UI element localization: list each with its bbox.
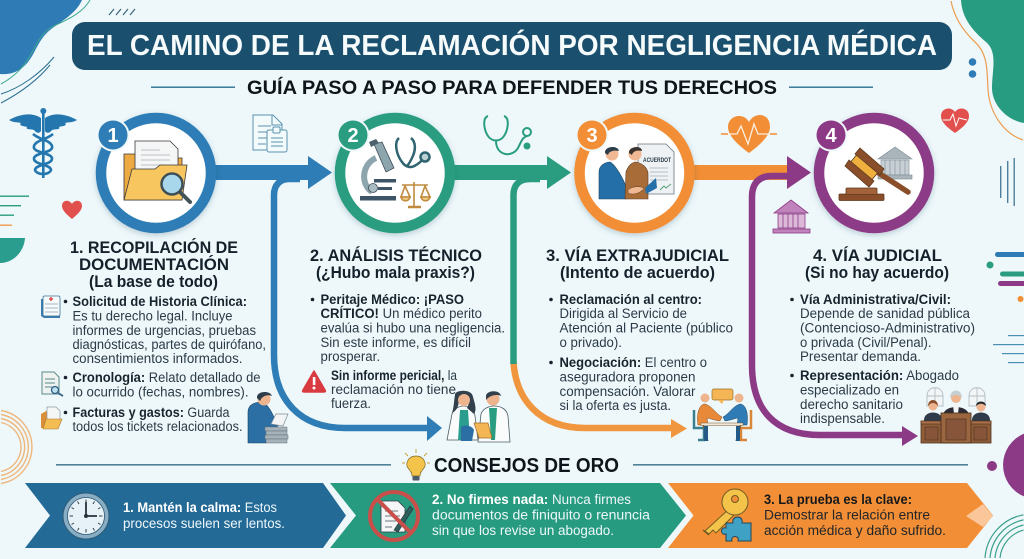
text block: peritaje: Peritaje Médico: ¡PASO [320,292,464,307]
icon: courthouse [878,147,912,179]
heading: consejos de oro [56,449,968,480]
decoration: top-left blue blob [0,0,135,103]
text block: step 4 bullets: Vía Administrativa/Civil: [800,292,951,307]
text block: step 1 bullets [64,294,266,434]
icon: clock [63,493,109,539]
text: tip 3 [764,492,946,538]
icon: orange heart with pulse [721,115,777,153]
text block: step 3 bullets: o privado). [560,335,622,350]
title banner [72,22,952,70]
decoration: bottom-right circle and rings [985,434,1024,558]
icon: medical record [41,296,60,318]
heading: consejos de oro: CONSEJOS DE ORO [434,455,619,477]
icon: red heart with pulse [941,109,969,133]
text block: peritaje: Sin este informe, es difícil [320,335,471,350]
text: tip 3: acción médica y daño sufrido. [764,523,946,538]
icon: caduceus [9,108,77,178]
icon: businessmen shaking hands [599,147,657,199]
heading: step 2: 2. ANÁLISIS TÉCNICO [310,246,482,265]
heading: step 1 [70,238,238,291]
icon: microscope [360,139,396,200]
icon: negotiation at table [694,389,751,441]
icon: two doctors [447,391,510,442]
text: tip 2: 2. No firmes nada: Nunca firmes [432,492,631,507]
text block: step 1 bullets: consentimientos informados. [72,351,242,366]
arrow: blue step 1 to 2 [212,156,332,189]
text block: step 3 bullets [549,292,733,413]
heading: step 3 [546,246,729,282]
text block: step 1 bullets: informes de urgencias, pruebas [72,323,256,338]
heading: step 4: 4. VÍA JUDICIAL [813,246,942,265]
text block: peritaje: CRÍTICO! Un médico perito [320,306,482,321]
step 4 circle: 4 [825,125,837,147]
text block: step 4 bullets: derecho sanitario [800,397,903,412]
icon: document sheets [253,115,287,152]
text block: step 4 bullets: Depende de sanidad pública [800,306,970,321]
panel: step 2 text [303,246,510,442]
heading: step 1: (La base de todo) [89,272,218,291]
text: tip 2: sin que los revise un abogado. [432,523,614,538]
icon: purple courthouse [773,200,810,233]
heading: step 2 [310,246,482,282]
text block: step 4 bullets: especializado en [800,382,899,398]
step 2 circle: 2 [347,125,359,147]
heading: step 4 [805,246,949,282]
text: tip 1 [123,500,285,531]
step 1 circle [96,118,211,228]
heading: step 3: (Intento de acuerdo) [560,263,715,282]
text block: step 4 bullets: Representación: Abogado [800,368,959,383]
step 3 circle [576,118,690,228]
icon: courtroom [921,388,991,443]
text: tip 1: 1. Mantén la calma: Estos [123,500,277,515]
text: tip 1: procesos suelen ser lentos. [123,516,285,531]
icon: stethoscope outline [484,116,531,154]
title banner: EL CAMINO DE LA RECLAMACIÓN POR NEGLIGENCIA MÉDICA [87,28,937,62]
icon: scales [401,182,430,207]
text block: step 3 bullets: Negociación: El centro o [560,355,707,370]
text block: peritaje [311,292,505,364]
step 3 circle: 3 [586,125,598,147]
text block: step 3 bullets: si la oferta es justa. [560,398,671,413]
arrowhead: purple step 4 [787,156,811,189]
panel: step 4 text [790,246,991,443]
text: tip 3: Demostrar la relación entre [764,508,930,522]
icon: agreement document: ACUERDOT [643,158,671,164]
text block: step 4 bullets: (Contencioso-Administrativo) [800,320,975,336]
icon: warning triangle [303,371,325,392]
text: tip 3: 3. La prueba es la clave: [764,492,912,507]
text block: step 4 bullets: indispensable. [800,411,885,426]
banner: tip 2 [330,483,686,548]
text block: step 3 bullets: aseguradora proponen [560,370,696,384]
text: tip 2: documentos de finiquito o renuncia [432,508,651,522]
step 4 circle [814,118,929,228]
arrow: green branch [514,179,540,364]
icon: person with paperwork [248,392,288,443]
text block: step 1 bullets: lo ocurrido (fechas, nombres). [72,384,248,400]
text block: step 4 bullets: o privada (Civil/Penal). [800,335,932,350]
banner: tip 3 [668,483,993,548]
decoration: right bars [986,252,1024,363]
icon: stethoscope [396,138,430,167]
subtitle: GUÍA PASO A PASO PARA DEFENDER TUS DERECHOS [247,76,777,99]
arrowhead: orange branch [671,419,687,438]
text block: step 3 bullets: Reclamación al centro: [560,292,702,307]
text block: warning: reclamación no tiene [331,382,456,397]
text block: step 4 bullets [790,292,975,426]
banner: tip 1 [25,483,346,548]
icon: open folder [41,407,62,429]
text block: step 1 bullets: Facturas y gastos: Guarda [72,405,230,420]
text block: peritaje: prosperar. [320,349,380,364]
icon: red heart [62,201,82,219]
arrow: orange branch to negotiation [514,362,672,428]
decoration: right vertical lines [1000,158,1015,206]
icon: folder with magnifier [124,141,190,202]
icon: no signing [370,492,418,540]
heading: step 1: DOCUMENTACIÓN [79,255,229,274]
text block: step 3 bullets: Dirigida al Servicio de [560,306,687,321]
panel: step 3 text [546,246,751,441]
step 1 circle: 1 [107,125,119,147]
heading: step 4: (Si no hay acuerdo) [805,263,949,282]
text block: warning: fuerza. [331,396,371,411]
icon: key and puzzle piece [703,489,751,541]
text: tip 2 [432,492,651,538]
text block: warning [331,368,457,411]
arrow: purple branch to court [752,176,918,446]
arrow: orange step 3 to 4 [692,165,789,180]
text block: warning: Sin informe pericial, la [331,368,457,383]
text block: step 1 bullets: Solicitud de Historia Clínica: [72,294,247,309]
icon: gavel [839,148,908,200]
text block: step 3 bullets: compensación. Valorar [560,384,696,399]
text block: step 3 bullets: Atención al Paciente (público [560,320,733,336]
text block: step 1 bullets: todos los tickets relacionados. [72,419,242,434]
heading: step 2: (¿Hubo mala praxis?) [316,263,475,282]
arrow: blue branch to experts [274,179,442,441]
decoration: top-right teal blob [951,0,1024,140]
arrow: green step 2 to 3 [452,156,571,189]
text block: peritaje: evalúa si hubo una negligencia. [320,320,505,336]
step 2 circle [336,118,450,228]
text block: step 1 bullets: diagnósticas, partes de quirófano, [72,337,266,352]
panel: step 1 text [41,238,288,443]
heading: step 1: 1. RECOPILACIÓN DE [70,238,238,257]
text block: step 1 bullets: Cronología: Relato detallado de [72,370,260,385]
heading: step 3: 3. VÍA EXTRAJUDICIAL [546,246,729,265]
icon: light bulb [402,449,430,480]
text block: step 4 bullets: Presentar demanda. [800,349,921,364]
icon: document with magnifier [42,372,63,396]
text block: step 1 bullets: Es tu derecho legal. Incluye [72,308,232,324]
decoration: left lines and shapes [0,196,32,484]
